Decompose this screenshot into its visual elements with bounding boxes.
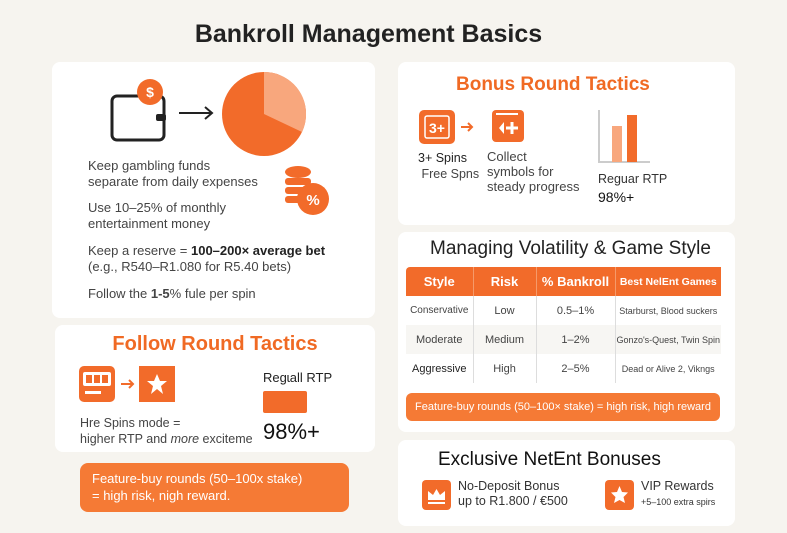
table: 2–5%	[561, 362, 590, 374]
table	[406, 267, 721, 383]
bonus: VIP: VIP Rewards	[641, 479, 714, 493]
table: 0.5–1%	[557, 304, 594, 316]
panel: bankroll basics: entertainment money	[88, 216, 210, 231]
bar chart	[598, 110, 667, 205]
text: Hre Spins mode =	[80, 416, 180, 430]
table: Medium	[485, 334, 524, 346]
table: Dead or Alive 2, Vikngs	[622, 364, 715, 374]
bar chart: Reguar RTP	[598, 172, 667, 186]
text: tips: Keep gambling funds	[88, 158, 210, 173]
panel: exclusive bonuses	[398, 440, 735, 526]
panel: bankroll basics: Use 10–25% of monthly	[88, 200, 226, 215]
table: Starburst, Blood suckers	[619, 306, 717, 316]
callout: feature-buy right: Feature-buy rounds (50–100× stake) = high risk, high reward	[415, 401, 711, 413]
text: tips: separate from daily expenses	[88, 174, 258, 189]
bonus: VIP: +5–100 extra spirs	[641, 497, 715, 507]
callout: feature-buy right	[406, 393, 720, 421]
table: Style	[424, 274, 455, 289]
panel: bonus round tactics	[398, 62, 735, 225]
label 3+ spins: Free Spns	[421, 167, 479, 181]
arrow	[179, 106, 214, 120]
bonus: no deposit	[422, 479, 568, 510]
text	[80, 416, 253, 446]
table: 1–2%	[561, 334, 590, 346]
callout: feature-buy left	[80, 463, 349, 512]
panel: bankroll basics: (e.g., R540–R1.080 for R5.40 bets)	[88, 259, 291, 274]
bar chart: 98%+	[598, 189, 634, 205]
icon: wallet	[110, 79, 166, 142]
text: tips	[88, 158, 258, 189]
icon: collect	[492, 110, 524, 142]
label collect: Collect	[487, 149, 527, 164]
panel: volatility	[398, 232, 735, 432]
panel: bankroll basics: Keep a reserve = 100–200× average bet	[88, 243, 325, 258]
table: % Bankroll	[542, 274, 609, 289]
panel: bankroll basics: Follow the 1-5% fule per spin	[88, 286, 256, 301]
callout: feature-buy left: Feature-buy rounds (50–100x stake)	[92, 471, 302, 486]
RTP	[263, 370, 332, 444]
icon: wallet: $	[146, 84, 154, 100]
icon: 3+ ticket	[419, 110, 474, 144]
table: Best NelEnt Games	[620, 276, 717, 288]
bonus: no deposit: up to R1.800 / €500	[458, 494, 568, 508]
heading: Bonus Round Tactics	[456, 74, 650, 95]
table: High	[493, 362, 516, 374]
label collect	[487, 149, 580, 194]
table: Risk	[491, 274, 518, 289]
table: Low	[494, 304, 515, 316]
heading: Managing Volatility & Game Style	[430, 238, 711, 259]
icon: 3+ ticket: 3+	[429, 120, 445, 136]
icon: coins percent	[285, 166, 329, 215]
RTP: 98%+	[263, 419, 320, 444]
icon: star	[139, 366, 175, 402]
icon: slot machine	[79, 366, 134, 402]
bonus: no deposit: No-Deposit Bonus	[458, 479, 559, 493]
label 3+ spins	[418, 151, 479, 181]
heading: Follow Round Tactics	[112, 333, 318, 355]
panel: bankroll basics	[52, 62, 375, 318]
heading: Exclusive NetEnt Bonuses	[438, 449, 661, 470]
table: Conservative	[410, 305, 468, 316]
table: Moderate	[416, 334, 462, 346]
text: higher RTP and more exciteme	[80, 432, 253, 446]
label collect: symbols for	[487, 164, 553, 179]
title: Bankroll Management Basics	[195, 20, 542, 48]
panel: follow round tactics	[55, 325, 375, 452]
table: Aggressive	[412, 362, 466, 374]
icon: coins percent: %	[306, 192, 320, 209]
callout: feature-buy left: = high risk, nigh reward.	[92, 488, 230, 503]
label collect: steady progress	[487, 179, 580, 194]
bonus: VIP	[605, 479, 715, 510]
RTP: Regɩall RTP	[263, 370, 332, 385]
pie chart	[222, 72, 306, 156]
label 3+ spins: 3+ Spins	[418, 151, 467, 165]
table: Gonzo's-Quest, Twin Spin	[616, 334, 720, 344]
